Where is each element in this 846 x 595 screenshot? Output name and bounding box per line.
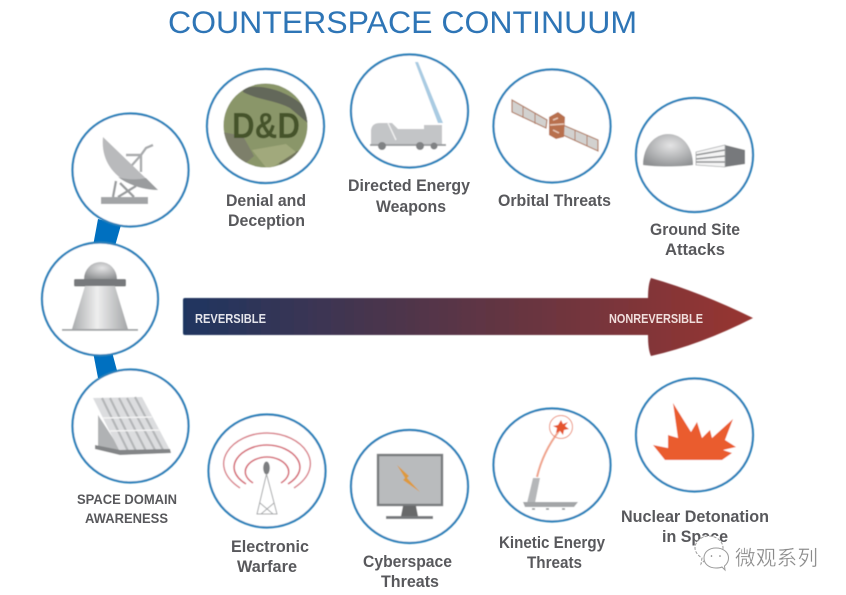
icon: monitor with bolt [378, 455, 442, 519]
label: denial and deception: Deception [228, 211, 305, 230]
icon: radio tower [224, 433, 310, 514]
label: directed energy weapons [348, 176, 471, 216]
panel: dome observatory [42, 242, 158, 356]
icon: dome and building [643, 134, 745, 167]
icon: ground sensor array [93, 397, 171, 455]
panel: solar array [72, 370, 188, 482]
arrow: reversible to nonreversible: NONREVERSIBLE [609, 311, 703, 326]
icon: explosion [653, 403, 736, 460]
watermark icon [695, 536, 728, 570]
label: orbital threats: Orbital Threats [498, 191, 611, 210]
label: directed energy weapons: Directed Energy [348, 176, 471, 195]
panel: electronic warfare [208, 414, 326, 528]
label: directed energy weapons: Weapons [376, 197, 446, 216]
label: space domain awareness: SPACE DOMAIN [77, 492, 177, 507]
arrow: reversible to nonreversible: REVERSIBLE [195, 311, 266, 326]
label: nuclear detonation in space [621, 507, 769, 546]
label: ground site attacks: Attacks [665, 240, 725, 259]
arrow: reversible to nonreversible [183, 278, 753, 356]
label: kinetic energy threats: Kinetic Energy [499, 533, 605, 552]
label: ground site attacks: Ground Site [650, 220, 740, 239]
icon: satellite [512, 100, 598, 151]
label: denial and deception: Denial and [226, 191, 306, 210]
panel: kinetic energy threats [494, 408, 610, 522]
panel: cyberspace threats [351, 430, 468, 543]
watermark text: 微观系列 [735, 547, 818, 570]
panel: directed energy weapons [351, 54, 468, 168]
label: electronic warfare [231, 537, 309, 576]
panel: denial and deception [207, 69, 324, 183]
panel: orbital threats [494, 70, 610, 182]
label: electronic warfare: Warfare [237, 557, 297, 576]
icon: missile launcher [523, 416, 578, 509]
icon: directed energy truck [370, 62, 446, 150]
label: cyberspace threats: Cyberspace [363, 552, 452, 571]
icon: camouflage D&D: D&D [232, 105, 300, 146]
panel: nuclear detonation [636, 378, 753, 492]
label: kinetic energy threats [499, 533, 605, 572]
label: ground site attacks [650, 220, 740, 259]
label: nuclear detonation in space: in Space [662, 527, 728, 546]
label: electronic warfare: Electronic [231, 537, 309, 556]
label: kinetic energy threats: Threats [527, 553, 582, 572]
label: cyberspace threats: Threats [381, 572, 439, 591]
icon: satellite dish [101, 137, 158, 204]
title: COUNTERSPACE CONTINUUM [168, 4, 637, 40]
label: space domain awareness: AWARENESS [85, 511, 168, 526]
panel: satellite dish [72, 114, 188, 226]
icon: dome telescope [62, 262, 138, 331]
connector: dish to dome [93, 219, 121, 246]
label: denial and deception [226, 191, 306, 230]
label: nuclear detonation in space: Nuclear Detonation [621, 507, 769, 526]
panel: ground site attacks [636, 98, 753, 212]
label: cyberspace threats [363, 552, 452, 591]
label: space domain awareness [77, 492, 177, 526]
connector: dome to solar array [93, 352, 119, 378]
